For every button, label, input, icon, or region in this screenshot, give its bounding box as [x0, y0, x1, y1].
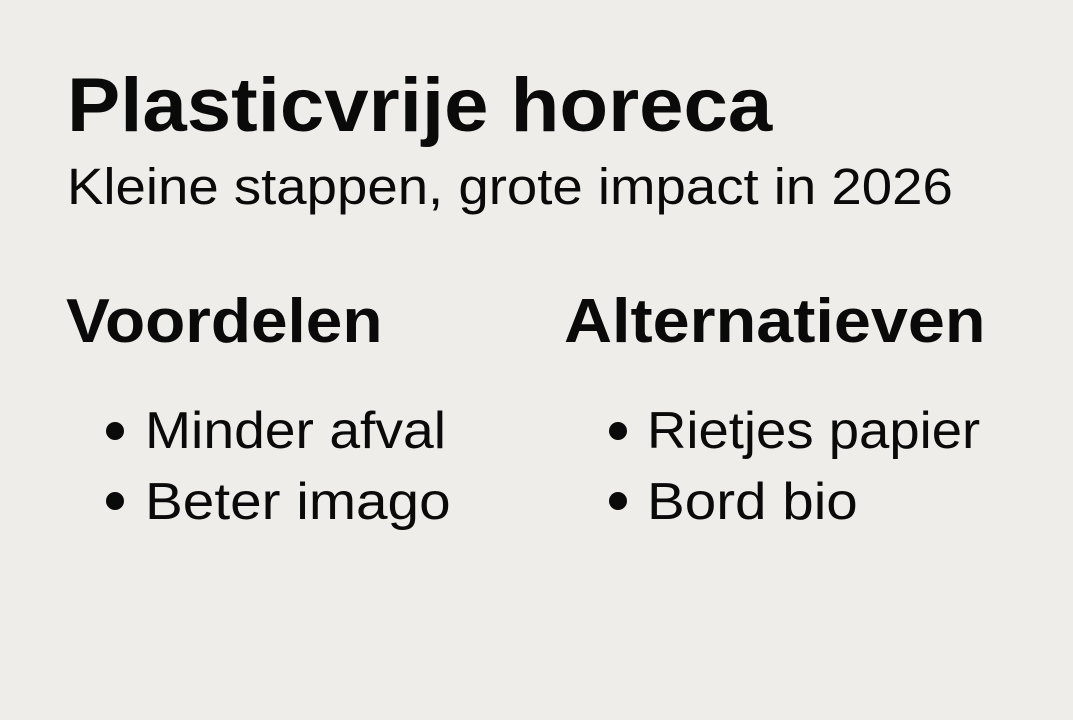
heading: alternatieven: Alternatieven: [564, 287, 985, 356]
panel: voordelen: [66, 287, 451, 531]
title: Plasticvrije horeca: [67, 63, 772, 148]
subtitle: Kleine stappen, grote impact in 2026: [66, 158, 952, 215]
list item: minder afval: Minder afval: [145, 402, 446, 460]
list item: bord bio: Bord bio: [647, 473, 858, 531]
heading: voordelen: Voordelen: [66, 287, 382, 356]
panel: alternatieven: [564, 287, 985, 531]
list item: beter imago: Beter imago: [145, 473, 451, 531]
list item: rietjes papier: Rietjes papier: [647, 402, 980, 460]
